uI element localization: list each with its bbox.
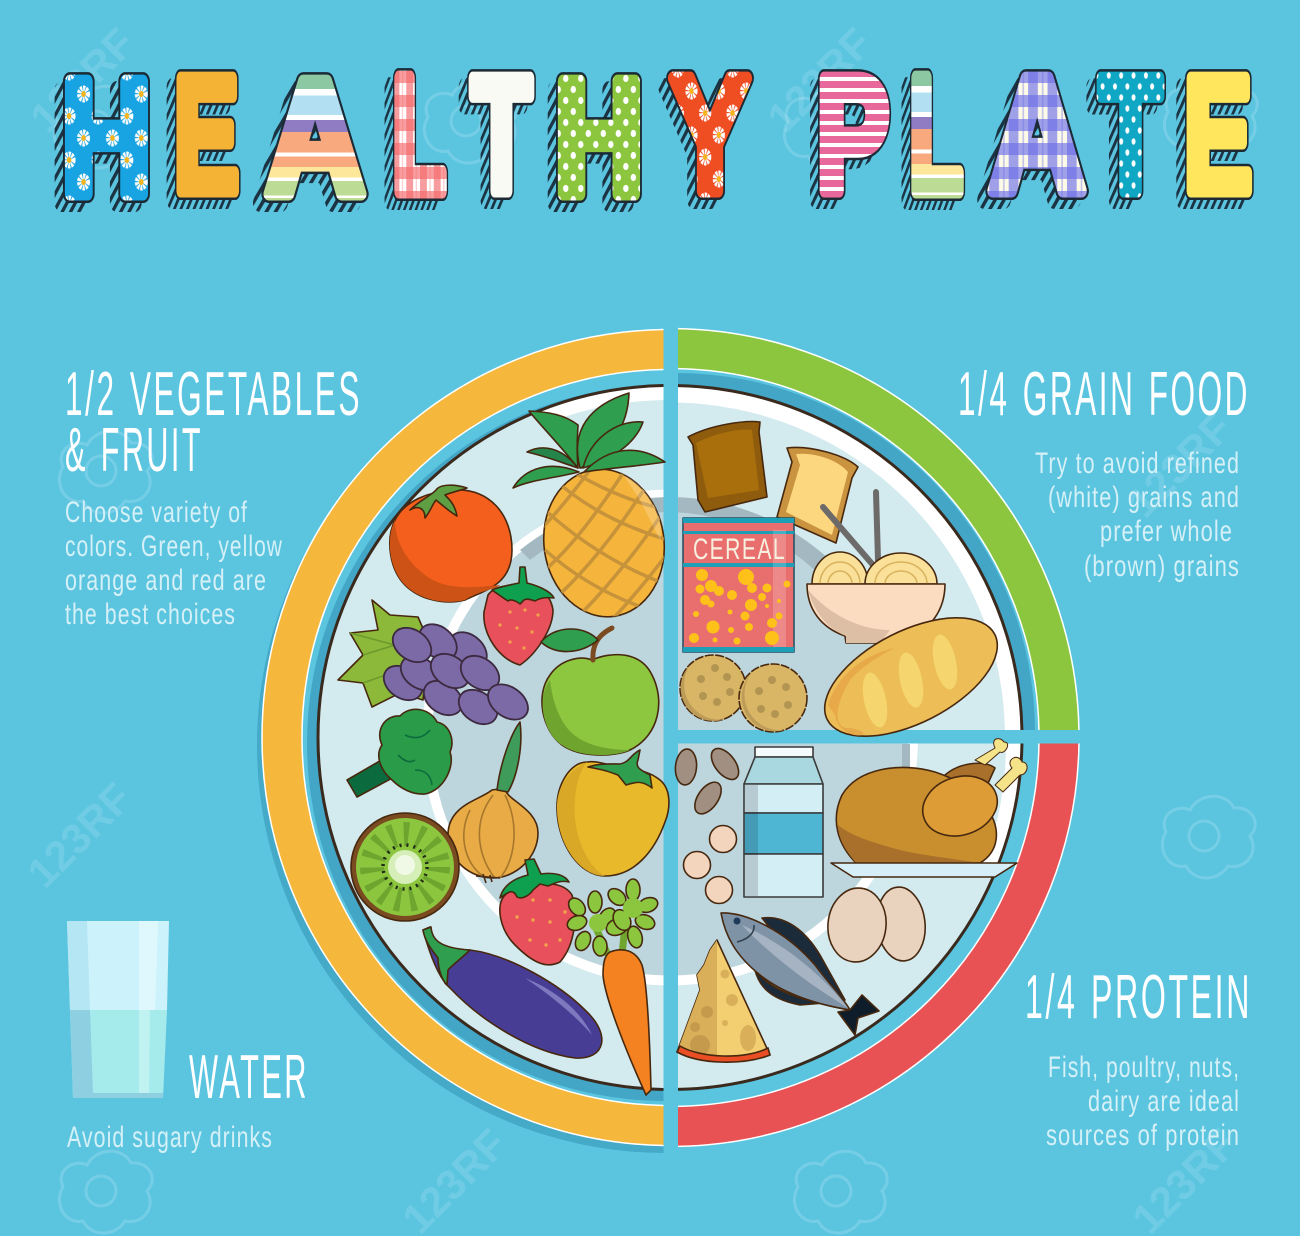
- icon: apple: [541, 628, 659, 755]
- letter E: E: [1175, 51, 1243, 235]
- letter A: A: [981, 52, 1077, 235]
- letter E: E: [1184, 42, 1252, 226]
- letter A: A: [257, 56, 356, 239]
- description: [1035, 447, 1240, 583]
- letter H: H: [554, 46, 643, 229]
- letter T: T: [471, 43, 532, 226]
- icon: baguette: [806, 593, 1016, 761]
- description: [1046, 1051, 1240, 1152]
- watermark: 123RF: [753, 774, 876, 896]
- description: the best choices: [65, 598, 236, 631]
- letter H: H: [546, 55, 635, 238]
- letter L: L: [392, 42, 445, 226]
- description: Choose variety of: [65, 496, 248, 529]
- icon: carrot: [565, 879, 660, 1095]
- letter P: P: [817, 43, 889, 226]
- letter H: H: [554, 46, 643, 229]
- icon: pineapple: [513, 393, 674, 625]
- icon: strawberry: [500, 859, 575, 965]
- letter T: T: [1091, 52, 1153, 235]
- plate: grain quarter: [678, 373, 1035, 730]
- plate: protein quarter: [678, 744, 1024, 1091]
- letter E: E: [174, 43, 239, 226]
- letter Y: Y: [671, 44, 749, 227]
- watermark: 123RF: [758, 19, 881, 141]
- letter L: L: [910, 42, 962, 226]
- watermark: 123RF: [1118, 404, 1241, 526]
- letter H: H: [62, 45, 152, 229]
- vegetables and fruit foods: [338, 393, 674, 1095]
- watermark: 123RF: [388, 404, 511, 526]
- watermark: 123RF: [18, 774, 141, 896]
- icon: cereal box: [683, 518, 794, 652]
- label: vegetables and fruit: [65, 360, 362, 631]
- icon: nuts: [684, 826, 736, 904]
- letter L: L: [392, 42, 445, 226]
- title: [53, 42, 1252, 239]
- description: colors. Green, yellow: [65, 530, 283, 563]
- icon: serving plate: [831, 863, 1017, 877]
- letter P: P: [809, 52, 881, 235]
- label: grain food: [958, 360, 1250, 583]
- description: (brown) grains: [1084, 550, 1240, 583]
- text: WATER: [189, 1043, 309, 1112]
- icon: cookies: [680, 655, 807, 732]
- ring: protein: [678, 744, 1080, 1148]
- letter T: T: [463, 52, 523, 235]
- watermark: 123RF: [21, 19, 144, 141]
- letter A: A: [989, 43, 1085, 226]
- icon: yellow pepper: [557, 750, 669, 876]
- letter A: A: [989, 43, 1085, 226]
- letter E: E: [174, 43, 239, 226]
- icon: kiwi: [351, 813, 459, 921]
- letter E: E: [1184, 42, 1252, 226]
- description: prefer whole: [1100, 515, 1233, 548]
- icon: onion: [448, 722, 538, 883]
- description: dairy are ideal: [1088, 1085, 1240, 1118]
- letter T: T: [1100, 43, 1162, 226]
- letter H: H: [62, 45, 152, 229]
- ring: grain food: [678, 328, 1080, 730]
- letter E: E: [165, 52, 231, 235]
- label: water: [67, 1043, 309, 1154]
- heading: & FRUIT: [65, 416, 203, 485]
- icon: brown bread: [688, 422, 767, 512]
- icon: milk carton: [744, 747, 823, 897]
- icon: beans: [674, 744, 744, 818]
- letter T: T: [471, 43, 532, 226]
- description: orange and red are: [65, 564, 267, 597]
- letter L: L: [384, 51, 437, 235]
- letter T: T: [1100, 43, 1162, 226]
- icon: grapes: [338, 600, 535, 731]
- ring: vegetables and fruit: [257, 328, 664, 1153]
- letter Y: Y: [671, 44, 749, 227]
- description: Avoid sugary drinks: [67, 1121, 273, 1154]
- protein foods: [674, 739, 1027, 1062]
- icon: cheese: [677, 940, 770, 1062]
- letter Y: Y: [663, 53, 741, 236]
- icon: cereal box: CEREAL: [693, 533, 786, 566]
- icon: fish: [721, 913, 879, 1035]
- letter P: P: [817, 43, 889, 226]
- icon: eggplant: [423, 927, 602, 1058]
- letter H: H: [53, 54, 143, 238]
- icon: eggs: [824, 885, 929, 965]
- icon: tomato: [390, 485, 512, 602]
- letter A: A: [266, 47, 365, 230]
- icon: strawberry: [484, 567, 554, 665]
- grain foods: [680, 422, 1016, 761]
- label: protein: [1025, 963, 1252, 1152]
- description: [65, 496, 283, 631]
- heading: [65, 360, 362, 485]
- icon: glass of water: [67, 921, 169, 1098]
- icon: spaghetti bowl: [807, 552, 945, 643]
- heading: 1/2 VEGETABLES: [65, 360, 362, 429]
- icon: forks: [823, 492, 878, 565]
- plate: left half: [307, 384, 664, 1101]
- icon: toast: [777, 447, 858, 543]
- icon: broccoli: [347, 709, 452, 797]
- letter L: L: [910, 42, 962, 226]
- letter L: L: [901, 51, 954, 235]
- letter A: A: [266, 47, 365, 230]
- icon: roast chicken: [836, 739, 1027, 863]
